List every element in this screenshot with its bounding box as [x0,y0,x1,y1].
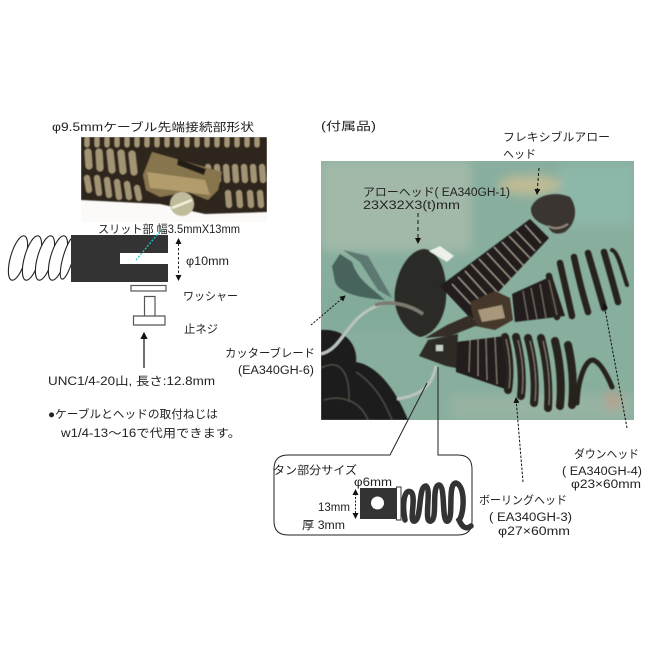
boring head spring [456,336,612,408]
note: substitute screw: w1/4-13～16で代用できます。 [60,427,241,440]
label: flexible arrow head: フレキシブルアロー [503,130,610,144]
label: arrow head: 23X32X3(t)mm [363,200,460,212]
note: substitute screw [48,407,241,440]
label: down head: φ23×60mm [571,479,641,491]
diagram: cable end schematic [4,234,168,368]
down head spring [512,250,627,322]
label: boring head: ( EA340GH-3) [489,512,572,524]
arrow: boring head pointer [516,398,523,482]
label: screw spec: UNC1/4-20山, 長さ:12.8mm [48,375,215,388]
arrow: down head pointer [604,304,627,428]
heading: accessories: (付属品) [321,120,376,133]
height dimension [354,490,356,518]
washer [131,286,166,291]
set screw [134,296,165,325]
arrow: arrow head pointer [417,213,419,243]
label: arrow head: アローヘッド( EA340GH-1) [363,187,510,199]
arrow: slit pointer [136,229,162,260]
arrow: flexible head pointer [537,168,539,194]
tang plate with hole [360,488,397,519]
label: diameter: φ10mm [186,256,229,268]
label: cutter blade: (EA340GH-6) [238,365,314,377]
arrow: diameter dimension [178,239,180,280]
callout: tang size [273,367,472,535]
label: down head: ( EA340GH-4) [562,466,642,478]
flexible arrow head spring [440,194,575,320]
label: flexible arrow head [503,130,610,161]
cutter blade [332,254,385,300]
arrow head blade [395,249,446,337]
label: thickness: 厚 3mm [302,519,345,532]
wire loop [321,304,436,399]
black cable [321,330,408,420]
tang collar [396,487,401,520]
label: hole diameter: φ6mm [354,477,392,489]
label: down head: ダウンヘッド [574,447,639,461]
coil spring outline [4,234,79,282]
label: boring head: ボーリングヘッド [479,493,567,507]
label: down head [562,447,642,491]
label: cutter blade: カッターブレード [225,346,315,360]
label: height: 13mm [318,502,350,514]
callout title: タン部分サイズ [273,463,357,477]
arrow: screw direction [143,333,145,368]
down head coupler [470,291,513,330]
photo: cable tip close-up [81,137,267,222]
label: flexible arrow head: ヘッド [503,149,536,161]
label: slit size: スリット部 幅3.5mmX13mm [98,223,240,236]
label: boring head [479,493,572,538]
heading: cable tip connection shape: φ9.5mmケーブル先端接続部形状 [52,120,255,134]
spring scribble [404,483,471,528]
label: arrow head [363,187,510,212]
photo: accessory heads [321,161,634,420]
label: set screw: 止ネジ [184,323,218,336]
label: boring head: φ27×60mm [498,526,570,538]
note: substitute screw: ●ケーブルとヘッドの取付ねじは [48,407,218,421]
label: cutter blade [225,346,315,377]
tang plate [419,334,458,368]
connector block with slit [71,235,168,282]
label: washer: ワッシャー [183,291,238,303]
arrow: cutter blade pointer [311,296,345,325]
